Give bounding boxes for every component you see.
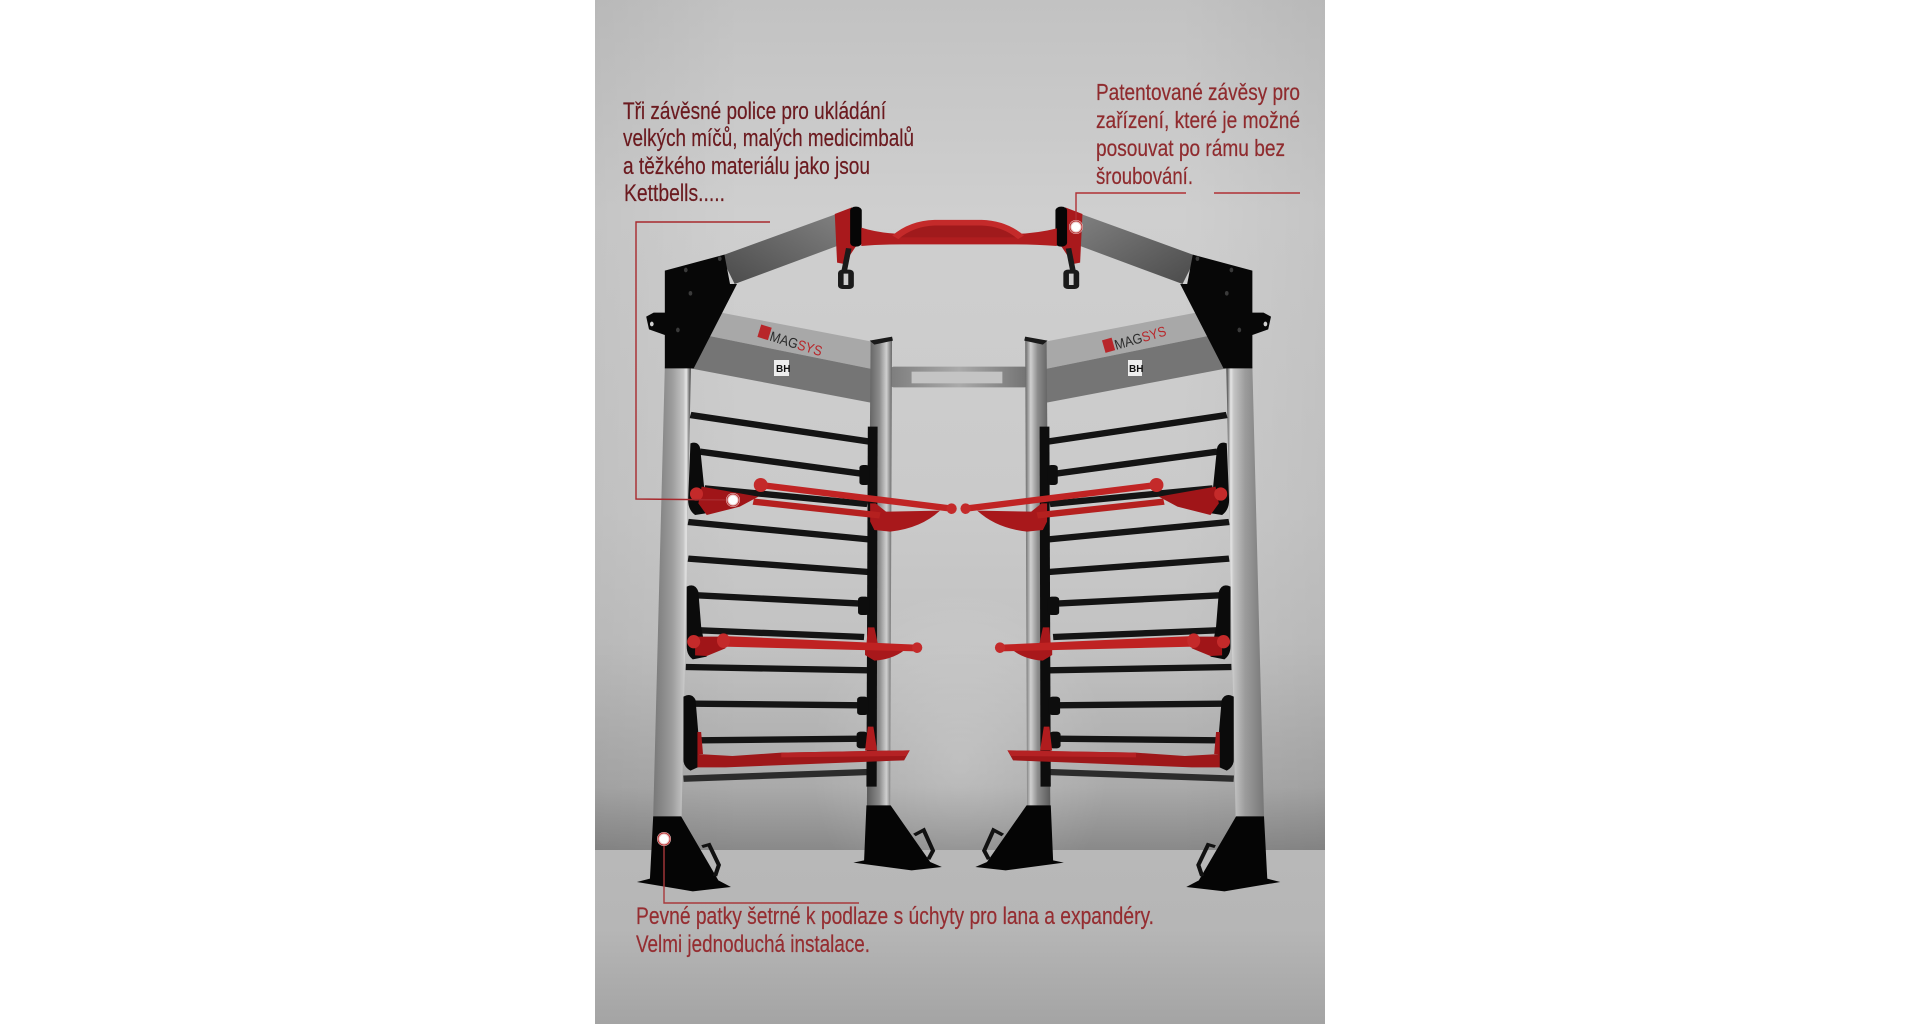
centre cross bar [891, 367, 1027, 387]
text block: shelves: velkých míčů, malých medicimbalů [623, 125, 914, 152]
inner post black strip [866, 427, 878, 787]
MAGSYS logo right: MAGSYS [1113, 323, 1168, 353]
text block: shelves: a těžkého materiálu jako jsou [623, 153, 870, 180]
bracket bolts [650, 256, 722, 332]
ladder rods [683, 415, 870, 779]
text block: hinges: šroubování. [1096, 163, 1193, 189]
BH badge right [1128, 360, 1143, 376]
text block: hinges: Patentované závěsy pro [1096, 79, 1300, 105]
BH badge left [774, 360, 790, 376]
hinge red cap [835, 207, 856, 264]
text block: hinges: zařízení, které je možné [1096, 107, 1300, 133]
text block: feet: Pevné patky šetrné k podlaze s úchyty pro lana a expandéry. [636, 903, 1154, 930]
wall bar frame illustration [637, 207, 1280, 891]
text block: shelves: Kettbells..... [624, 180, 725, 207]
black side plates [683, 443, 717, 771]
top shelf [690, 478, 957, 532]
upper arm [721, 213, 838, 284]
hinge black end [850, 207, 862, 247]
BH badge right: BH [1129, 364, 1143, 375]
text block: shelves: Tři závěsné police pro ukládání [623, 98, 886, 125]
shelf header front face [690, 335, 880, 403]
bracket [646, 255, 737, 368]
left frame half [637, 207, 957, 891]
marker: shelf [726, 493, 740, 507]
text block: feet: Velmi jednoduchá instalace. [636, 931, 870, 958]
shelf header top face [704, 312, 880, 371]
marker: hinge [1069, 220, 1083, 234]
bottom shelf [697, 727, 910, 767]
MAGSYS logo left: MAGSYS [768, 328, 824, 359]
callout line: feet [664, 839, 859, 903]
text block: feet [636, 903, 1154, 958]
callout line: hinges [1076, 193, 1186, 227]
inner post [867, 337, 892, 807]
hanging chain [841, 248, 851, 287]
outer post [653, 367, 691, 817]
right frame half (mirrored) [960, 207, 1280, 891]
red pull-up bar [861, 223, 1057, 246]
black rod clamps [857, 465, 870, 748]
panel: photo background [595, 0, 1325, 1024]
outer foot [637, 816, 731, 891]
callout line: hinges right segment [1214, 192, 1300, 194]
text block: hinges: posouvat po rámu bez [1096, 135, 1285, 161]
marker: foot [657, 832, 671, 846]
callout line: shelves [636, 222, 770, 500]
inner foot [853, 805, 942, 870]
middle shelf [687, 627, 922, 661]
BH badge left: BH [776, 364, 790, 375]
text block: shelves [623, 98, 914, 207]
inner post cap [870, 337, 893, 345]
text block: hinges [1096, 79, 1300, 189]
